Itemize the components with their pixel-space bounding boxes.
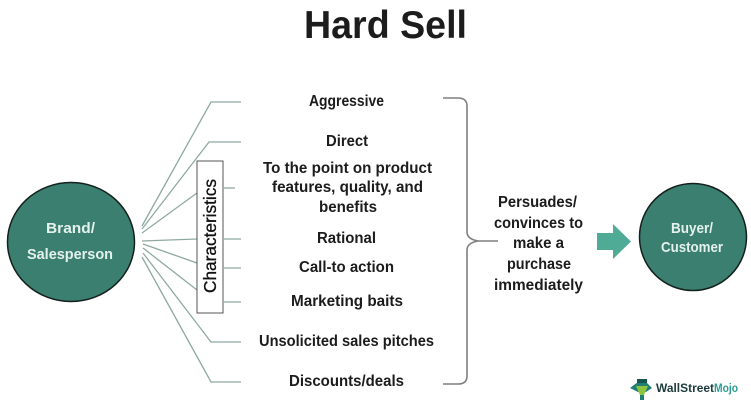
logo: WallStreetMojo: Mojo bbox=[714, 381, 738, 395]
node: Buyer/Customer: Customer bbox=[661, 239, 723, 256]
list of characteristics: benefits bbox=[319, 199, 377, 216]
list of characteristics: Direct bbox=[326, 133, 368, 150]
logo: WallStreetMojo bbox=[630, 379, 738, 400]
list of characteristics: features, quality, and bbox=[272, 179, 423, 196]
node: Brand/Salesperson: Brand/ bbox=[46, 220, 96, 237]
node: Buyer/Customer bbox=[640, 184, 746, 290]
list of characteristics: Unsolicited sales pitches bbox=[259, 333, 434, 350]
list of characteristics: Rational bbox=[317, 230, 376, 247]
list of characteristics: Call-to action bbox=[299, 259, 394, 276]
logo: WallStreetMojo: WallStreet bbox=[656, 381, 714, 395]
characteristics label box: Characteristics bbox=[200, 179, 220, 293]
characteristics label box bbox=[197, 161, 223, 313]
node: Buyer/Customer: Buyer/ bbox=[671, 220, 714, 237]
title: Hard Sell bbox=[304, 4, 467, 47]
outcome text: make a bbox=[513, 235, 564, 252]
outcome text: Persuades/ bbox=[498, 194, 578, 211]
brace bbox=[443, 98, 498, 384]
list of characteristics: To the point on product bbox=[263, 160, 432, 177]
outcome text bbox=[494, 194, 583, 294]
outcome text: convinces to bbox=[494, 215, 583, 232]
list of characteristics: Aggressive bbox=[309, 93, 384, 110]
connector lines from brand to characteristics bbox=[142, 102, 241, 382]
arrow bbox=[597, 224, 631, 259]
outcome text: immediately bbox=[494, 277, 583, 294]
outcome text: purchase bbox=[507, 256, 571, 273]
icon: logo mark bbox=[630, 379, 652, 400]
node: Brand/Salesperson bbox=[8, 182, 134, 302]
node: Brand/Salesperson: Salesperson bbox=[27, 246, 113, 263]
list of characteristics: Marketing baits bbox=[291, 293, 403, 310]
list of characteristics: Discounts/deals bbox=[289, 373, 404, 390]
list of characteristics bbox=[259, 93, 434, 390]
